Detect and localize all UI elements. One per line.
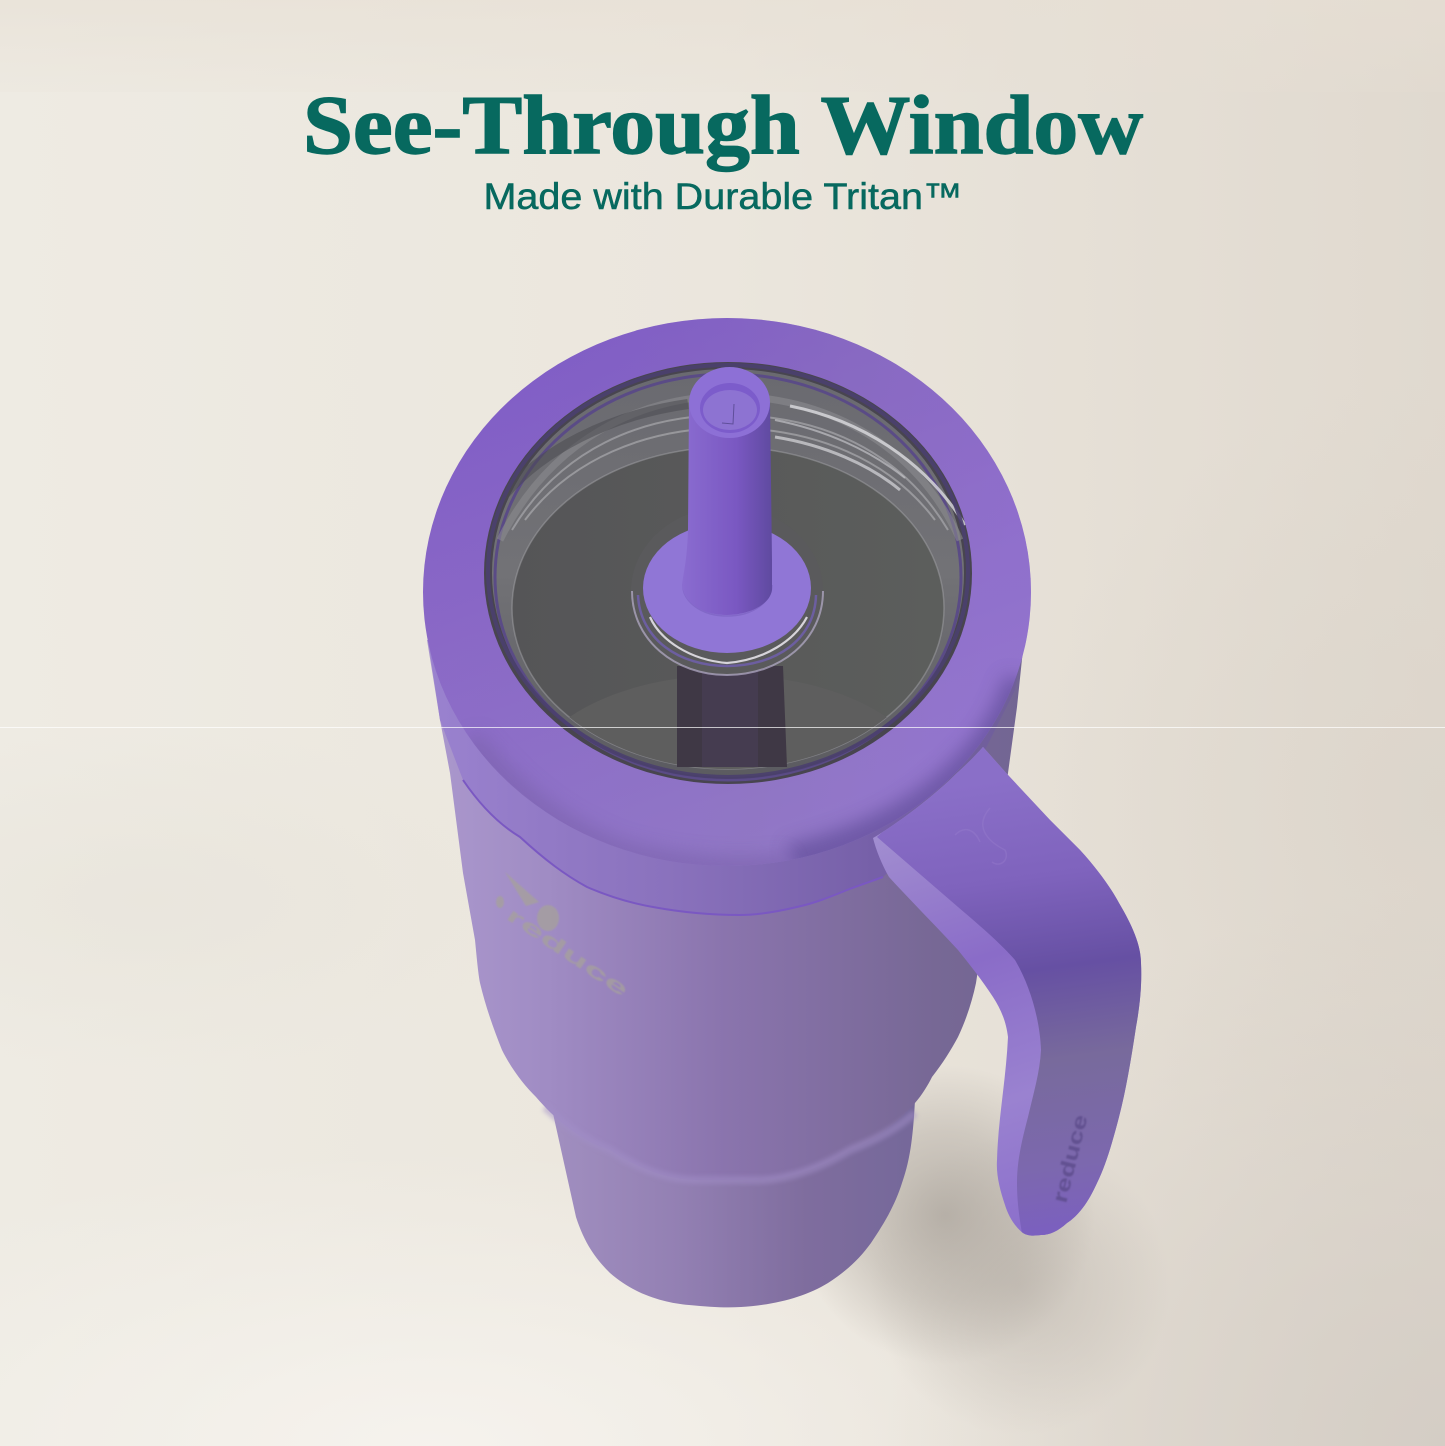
see-through window bbox=[484, 362, 972, 784]
title: See-Through Window bbox=[303, 79, 1143, 172]
straw bbox=[682, 367, 772, 616]
gasket disk bbox=[643, 523, 811, 653]
purple seal line bbox=[495, 374, 961, 780]
tumbler lower base bbox=[550, 1100, 915, 1307]
logo dot bbox=[496, 896, 504, 908]
cast shadow bbox=[795, 1065, 1170, 1435]
straw reflection bbox=[677, 666, 787, 767]
window dark glass floor bbox=[512, 450, 944, 716]
handle bbox=[873, 740, 1150, 1240]
straw opening bbox=[700, 383, 760, 433]
handle outer face bbox=[877, 740, 1150, 1240]
collar band bbox=[428, 640, 1024, 915]
handle embossed mark bbox=[955, 808, 1006, 864]
engraved logo bbox=[496, 872, 632, 1002]
handle wordmark: reduce bbox=[1050, 1113, 1093, 1205]
horizontal hairline bbox=[0, 727, 1445, 728]
straw flare base bbox=[683, 585, 772, 616]
straw top bbox=[689, 367, 770, 438]
lid outer ring bbox=[423, 318, 1031, 869]
logo sprout bbox=[505, 872, 539, 906]
lid rounded edge shading bbox=[470, 680, 1020, 869]
collar edge line bbox=[463, 780, 883, 915]
floor edge highlight bbox=[512, 447, 944, 769]
straw shaft bbox=[682, 402, 772, 615]
lower rim lines bbox=[488, 365, 968, 777]
glass thread band bbox=[492, 369, 964, 777]
straw gasket ring bbox=[631, 507, 823, 675]
subtitle: Made with Durable Tritan™ bbox=[484, 176, 962, 217]
base groove highlight bbox=[545, 1107, 915, 1180]
logo wordmark: reduce bbox=[502, 904, 632, 1002]
logo leaf bbox=[537, 905, 559, 931]
window rim bbox=[484, 362, 972, 784]
tumbler bbox=[423, 318, 1170, 1435]
glass thread reflections bbox=[500, 396, 965, 540]
floor lower shade bbox=[570, 717, 886, 769]
ring highlight bbox=[650, 617, 807, 663]
tumbler upper body bbox=[427, 640, 1024, 1180]
straw slit bbox=[722, 404, 734, 424]
